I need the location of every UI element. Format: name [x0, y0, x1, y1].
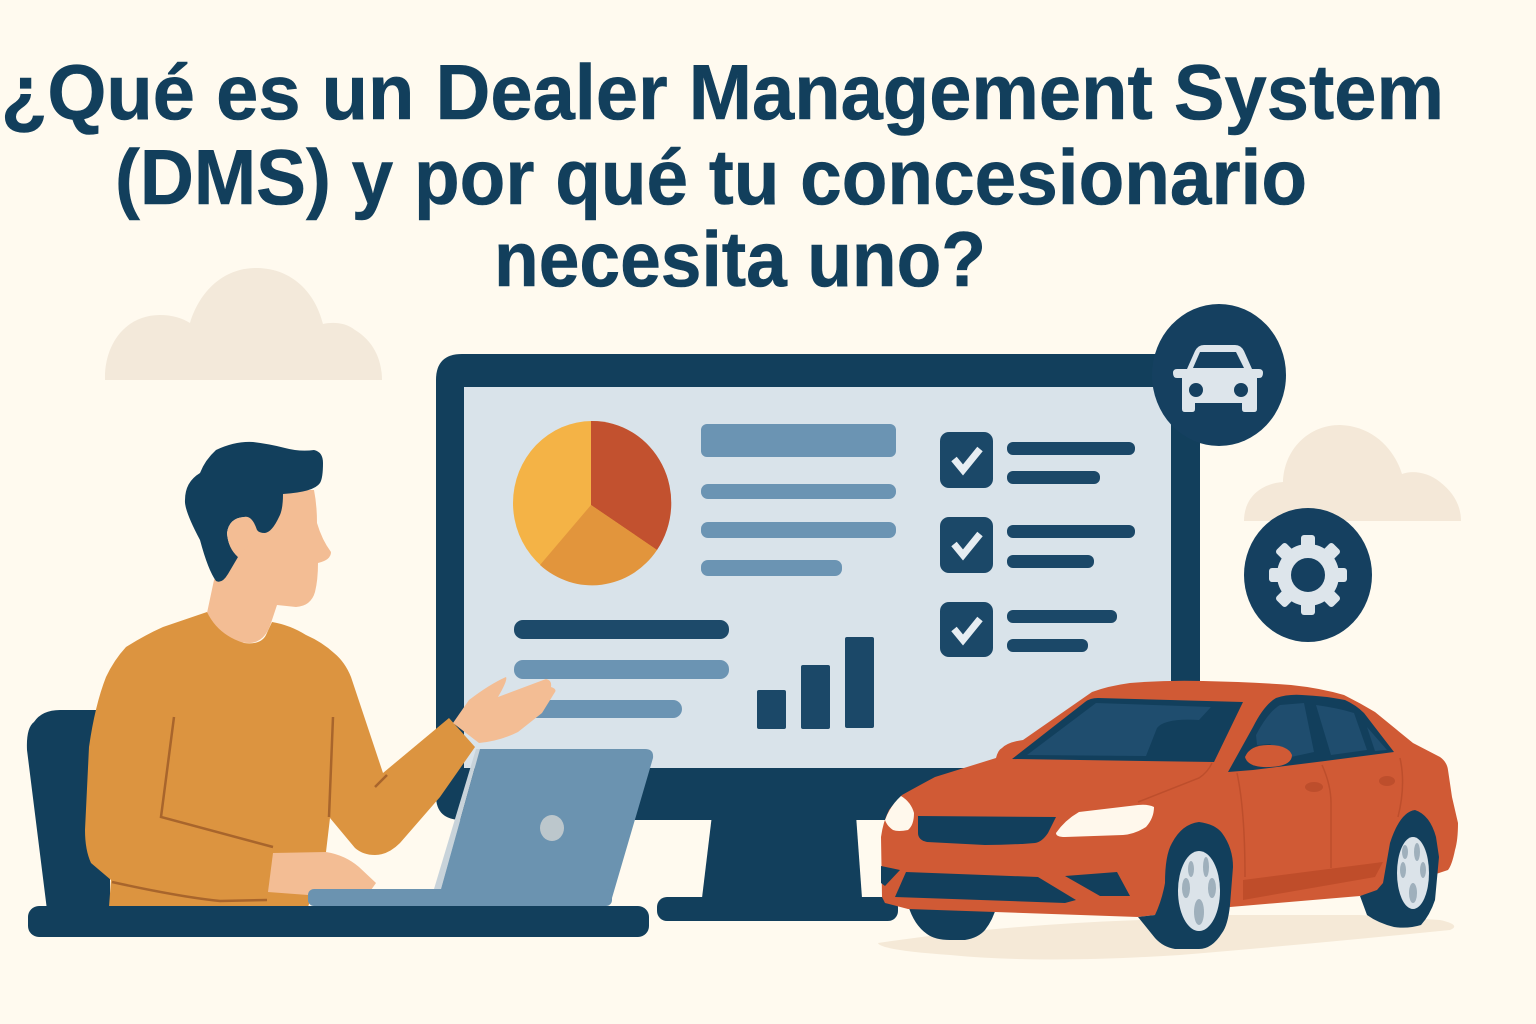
door handles: [1305, 782, 1323, 792]
title: ¿Qué es un Dealer Management System: [1, 48, 1444, 136]
side mirror: [1245, 745, 1292, 767]
icon: gear badge: [1244, 508, 1372, 642]
grille: [918, 816, 1056, 845]
sweater: [85, 612, 475, 907]
monitor screen: [464, 387, 1171, 768]
chair: [27, 710, 110, 910]
headlights: [885, 796, 914, 831]
monitor: [436, 354, 1200, 921]
checklist item 1: [940, 432, 1135, 488]
monitor stand: [702, 815, 862, 898]
title: [1, 48, 1444, 303]
checklist item 3: [940, 602, 1117, 657]
cloud: left: [105, 268, 382, 380]
front wheel: [1138, 822, 1233, 949]
car ground shadow: [878, 915, 1454, 960]
pie chart: [513, 421, 671, 585]
icon: car badge: [1152, 304, 1286, 446]
car: [881, 681, 1458, 949]
lower intakes: [881, 866, 1130, 903]
text lines: top centre: [701, 424, 896, 576]
text lines: lower left: [514, 620, 729, 718]
person: [85, 442, 556, 907]
checklist: [940, 432, 1135, 657]
title: (DMS) y por qué tu concesionario: [115, 133, 1307, 221]
sweater fold lines: [112, 717, 387, 901]
neck and head: [207, 490, 331, 643]
ear: [227, 517, 258, 557]
side windows: [1228, 695, 1394, 772]
cloud: right: [1244, 425, 1461, 521]
hand on laptop: [268, 852, 376, 895]
laptop: [308, 749, 653, 906]
rear wheel: [1360, 810, 1439, 928]
hand gesture: [453, 677, 556, 743]
monitor frame: [436, 354, 1200, 820]
far wheel: [908, 905, 997, 940]
bar chart: [757, 637, 874, 729]
title: necesita uno?: [494, 215, 986, 303]
body: [881, 681, 1458, 917]
hair: [185, 442, 323, 582]
checklist item 2: [940, 517, 1135, 573]
windshield: [1012, 698, 1243, 762]
desk: [28, 906, 649, 937]
body side shadow: [1243, 862, 1383, 900]
door and hood lines: [1138, 758, 1403, 877]
